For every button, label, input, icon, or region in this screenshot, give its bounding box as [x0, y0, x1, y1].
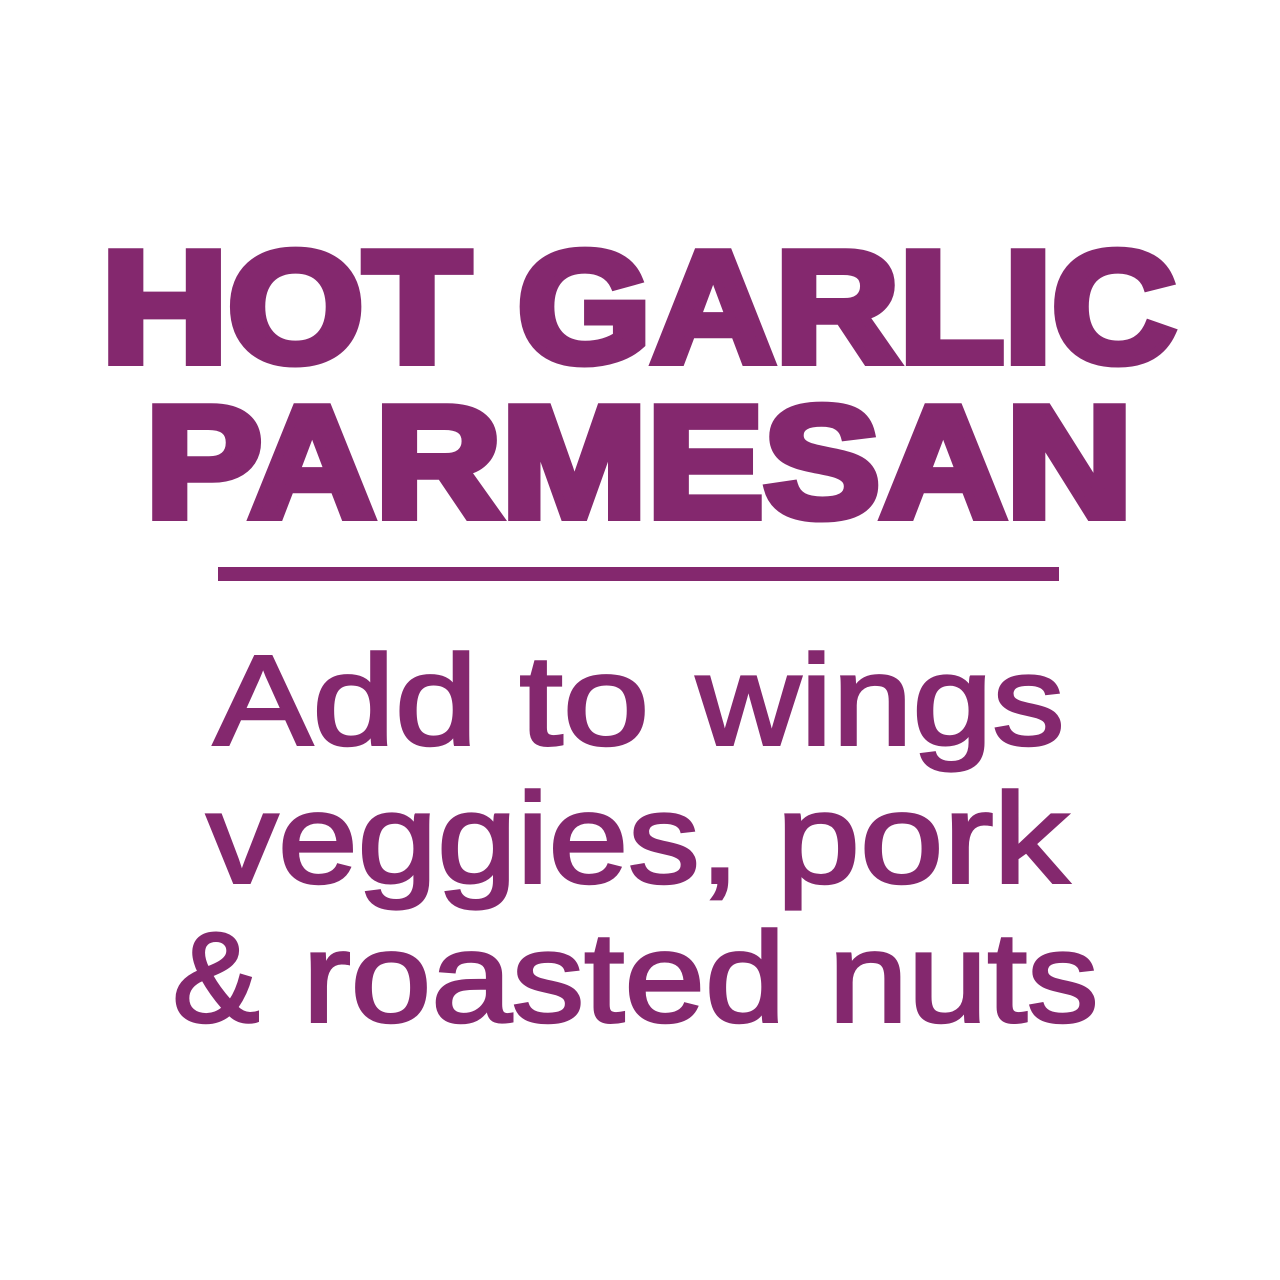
title: PARMESAN	[146, 374, 1132, 550]
usage description	[172, 630, 1098, 1050]
usage description: &	[172, 906, 260, 1050]
divider rule	[218, 567, 1059, 581]
usage description: wings	[695, 630, 1064, 772]
usage description: roasted	[302, 906, 786, 1050]
usage description: veggies,	[206, 768, 740, 910]
title	[102, 220, 1176, 550]
title: HOT	[102, 220, 470, 396]
usage description: Add	[214, 630, 478, 772]
title: GARLIC	[518, 220, 1176, 396]
usage description: to	[520, 630, 650, 772]
usage description: nuts	[828, 906, 1098, 1050]
usage description: pork	[776, 768, 1070, 910]
